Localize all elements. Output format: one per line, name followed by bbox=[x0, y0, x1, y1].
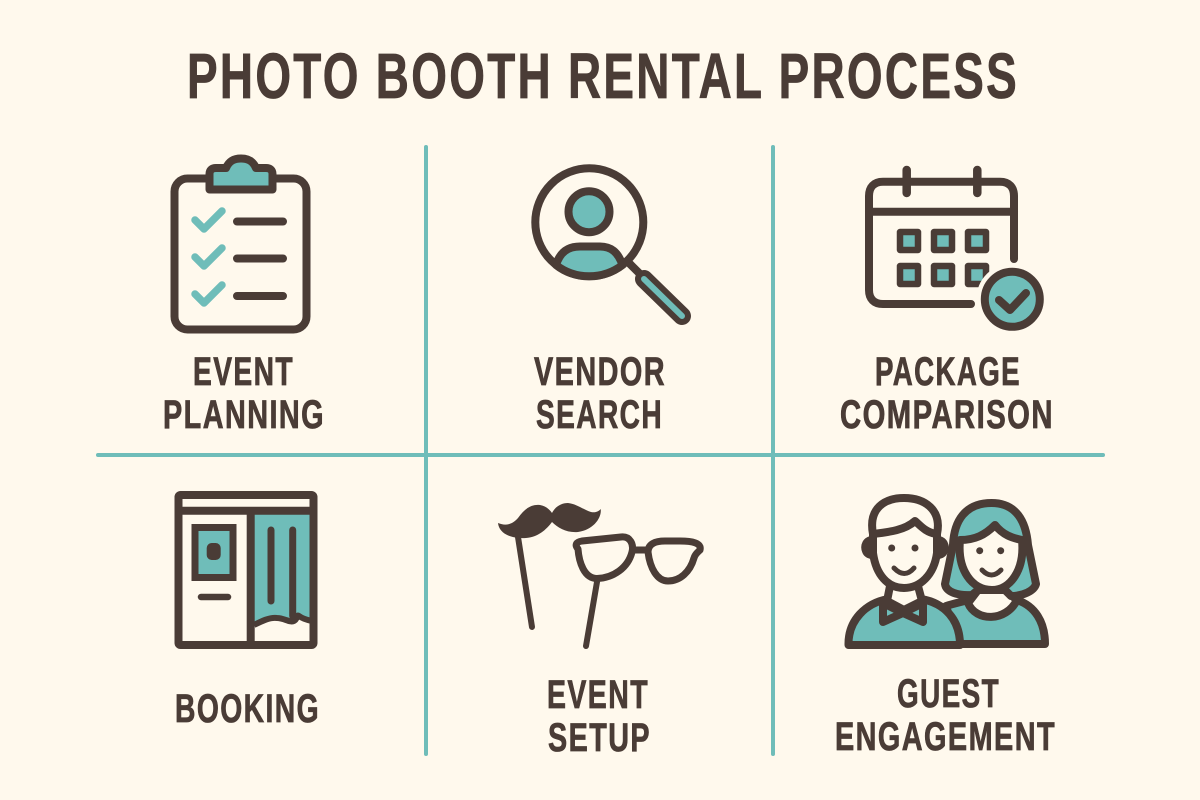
label: booking: BOOKING bbox=[175, 687, 320, 731]
label: vendor search: VENDOR bbox=[534, 350, 666, 394]
icon: mustache and glasses props bbox=[498, 503, 700, 646]
icon: clipboard checklist bbox=[174, 158, 306, 330]
panel: booking bbox=[175, 495, 320, 731]
label: event planning: PLANNING bbox=[163, 393, 325, 437]
icon: photo booth bbox=[178, 495, 314, 645]
label: package comparison bbox=[840, 350, 1054, 437]
label: vendor search bbox=[534, 350, 666, 437]
label: event planning: EVENT bbox=[193, 350, 294, 394]
panel: vendor search bbox=[534, 168, 682, 437]
woman bbox=[945, 503, 1045, 644]
icon: couple of guests bbox=[848, 498, 1045, 645]
panel: event planning bbox=[163, 158, 325, 437]
label: event setup bbox=[547, 673, 651, 760]
label: guest engagement bbox=[835, 672, 1056, 759]
label: guest engagement: ENGAGEMENT bbox=[835, 715, 1056, 759]
label: event setup: SETUP bbox=[548, 716, 651, 760]
man bbox=[848, 498, 960, 645]
icon: calendar with check badge bbox=[869, 170, 1048, 335]
icon: magnifying glass with person bbox=[535, 168, 682, 316]
label: vendor search: SEARCH bbox=[536, 393, 663, 437]
label: event planning bbox=[163, 350, 325, 437]
label: package comparison: COMPARISON bbox=[840, 393, 1054, 437]
panel: event setup bbox=[498, 503, 700, 760]
label: package comparison: PACKAGE bbox=[875, 350, 1021, 394]
label: event setup: EVENT bbox=[547, 673, 649, 717]
panel: package comparison bbox=[840, 170, 1054, 437]
panel: guest engagement bbox=[835, 498, 1056, 759]
label: guest engagement: GUEST bbox=[897, 672, 1000, 716]
